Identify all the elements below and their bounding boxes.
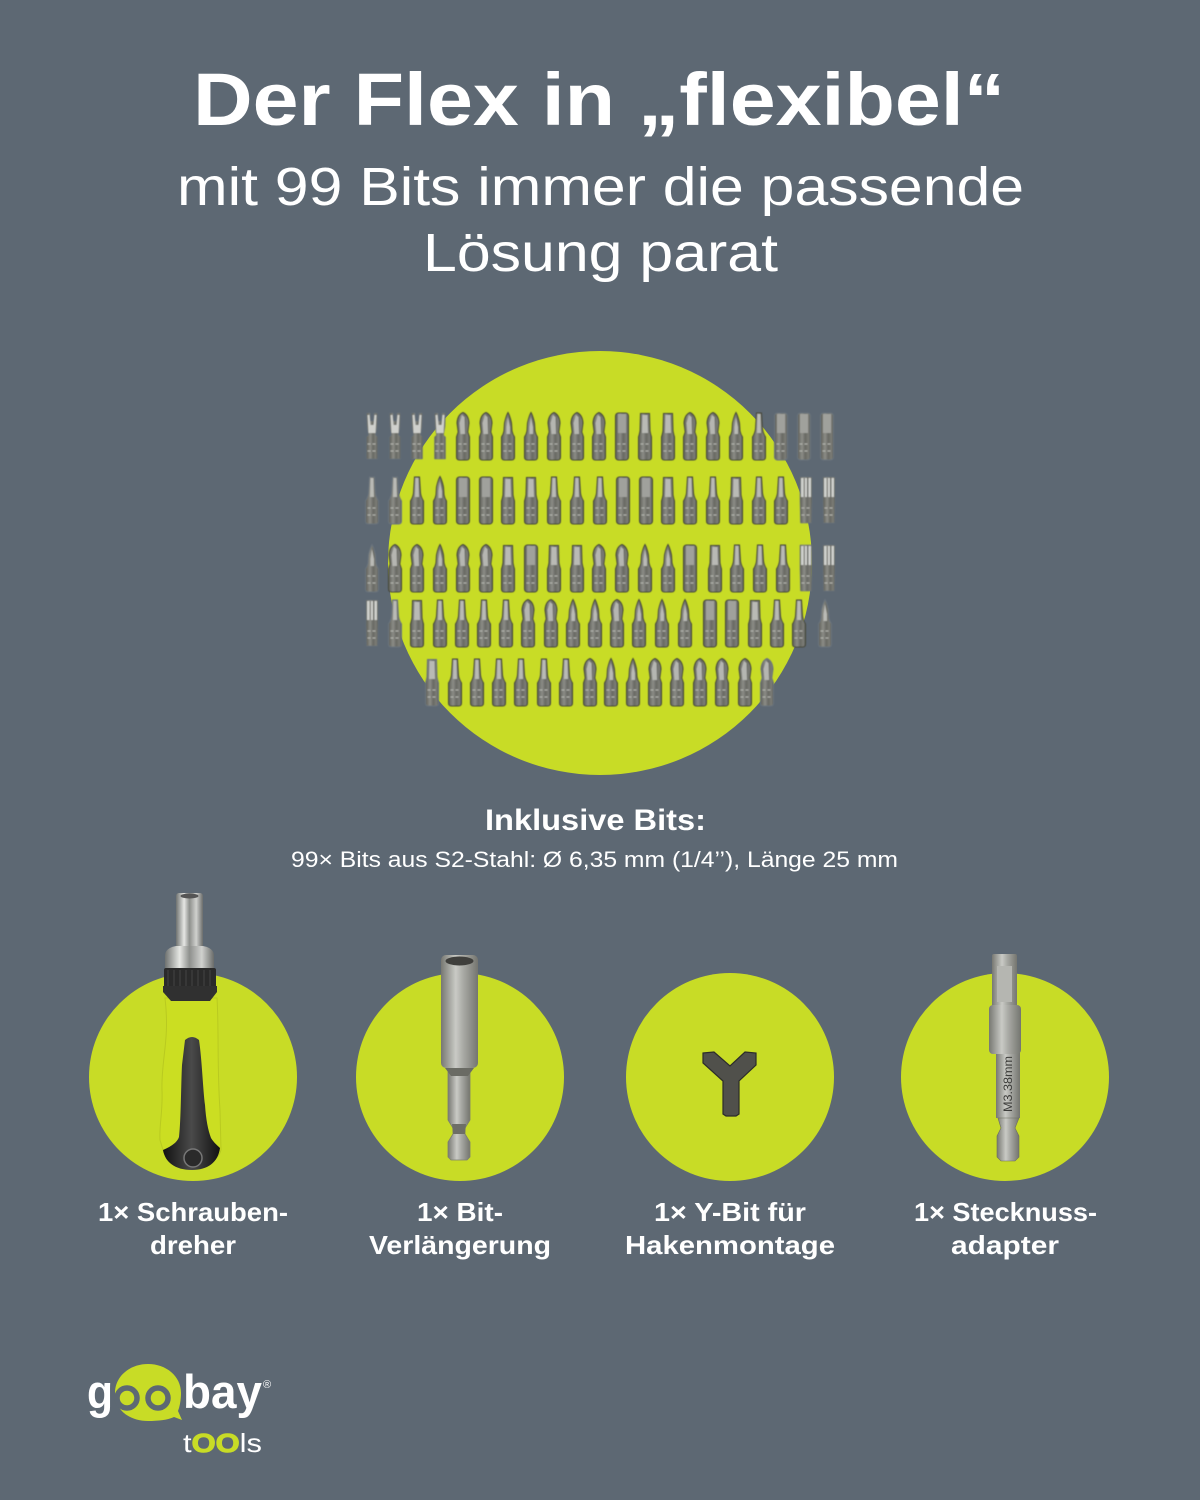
label: bit extension: Verlängerung bbox=[369, 1230, 551, 1260]
title: Der Flex in „flexibel“ bbox=[193, 58, 1005, 141]
bits row 5 bbox=[426, 658, 774, 706]
bits row 4 bbox=[366, 600, 832, 647]
label: bit extension: 1× Bit- bbox=[417, 1197, 503, 1227]
logo rings bbox=[117, 1388, 168, 1408]
label: socket adapter bbox=[914, 1197, 1097, 1260]
item: socket adapter bbox=[901, 954, 1109, 1181]
icon: screwdriver bbox=[160, 893, 221, 1170]
bits row 3 bbox=[366, 544, 835, 592]
label: bit extension bbox=[369, 1197, 551, 1260]
icon: Y-bit bbox=[703, 1052, 756, 1116]
adapter engraving: M3.38mm bbox=[1001, 1056, 1015, 1112]
label: Y-bit bbox=[625, 1197, 835, 1260]
logo tools line: tOO ls bbox=[183, 1428, 262, 1458]
subtitle bbox=[177, 157, 1024, 283]
label: Y-bit: 1× Y-Bit für bbox=[654, 1197, 806, 1227]
label: screwdriver: 1× Schrauben- bbox=[98, 1197, 288, 1227]
logo: goobay tools: ® bbox=[263, 1379, 271, 1391]
bits row 1 bbox=[366, 412, 834, 460]
bits row 2 bbox=[366, 476, 835, 524]
subtitle: Lösung parat bbox=[423, 223, 778, 283]
included bits heading: Inklusive Bits: bbox=[485, 804, 706, 837]
subtitle: mit 99 Bits immer die passende bbox=[177, 157, 1024, 217]
label: socket adapter: adapter bbox=[951, 1230, 1059, 1260]
label: Y-bit: Hakenmontage bbox=[625, 1230, 835, 1260]
item: bit extension bbox=[356, 955, 564, 1181]
icon: bit extension bbox=[441, 955, 478, 1160]
bit set with lime circle bbox=[366, 351, 835, 775]
logo: goobay tools: bay bbox=[183, 1365, 262, 1418]
label: screwdriver bbox=[98, 1197, 288, 1260]
label: screwdriver: dreher bbox=[150, 1230, 236, 1260]
icon: socket adapter bbox=[989, 954, 1021, 1161]
logo speech bubble bbox=[115, 1364, 182, 1421]
label: socket adapter: 1× Stecknuss- bbox=[914, 1197, 1097, 1227]
logo wordmark: g bbox=[87, 1365, 113, 1418]
included bits description: 99× Bits aus S2-Stahl: Ø 6,35 mm (1/4’’), Länge 25 mm bbox=[291, 847, 898, 872]
logo: goobay tools bbox=[87, 1364, 271, 1458]
item: Y-bit bbox=[626, 973, 834, 1181]
item: screwdriver bbox=[89, 893, 297, 1181]
